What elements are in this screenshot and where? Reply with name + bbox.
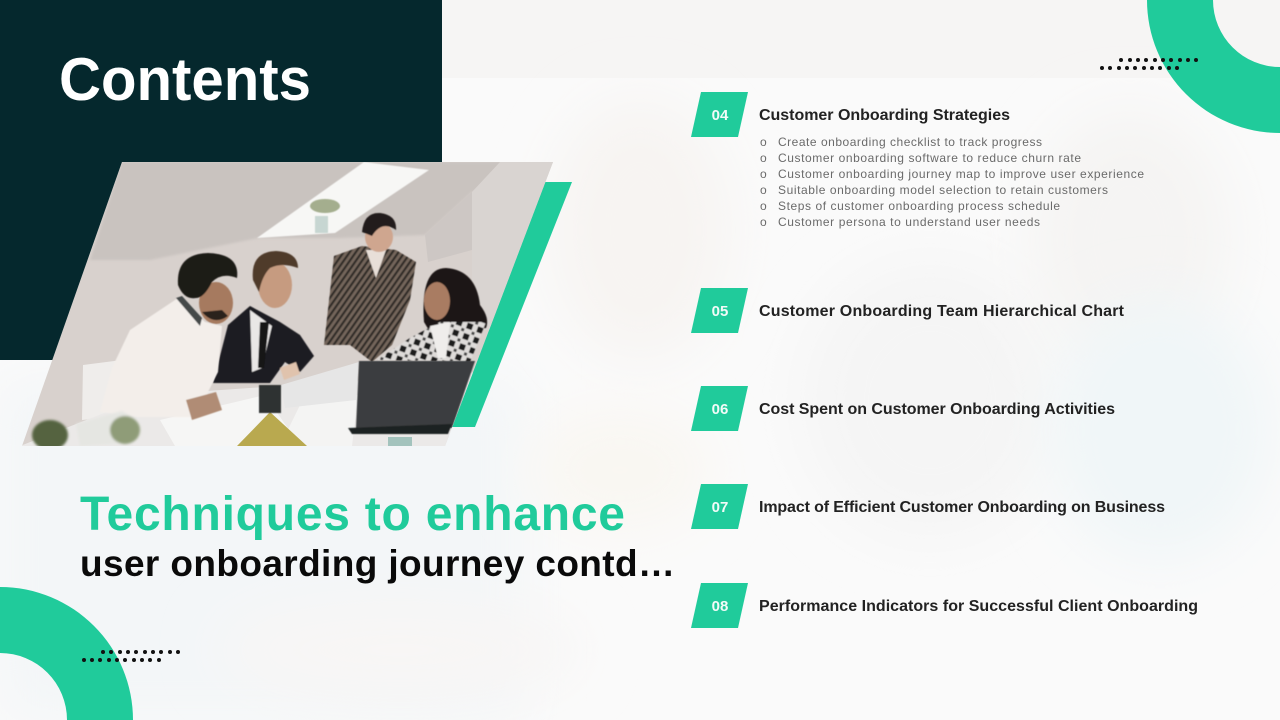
man in dark suit [213, 251, 314, 383]
title: Contents [59, 46, 311, 113]
bullet list 04: Suitable onboarding model selection to retain customers [778, 183, 1108, 197]
item 08: Performance Indicators: Performance Indicators for Successful Client Onboarding [759, 598, 1198, 615]
table [20, 372, 480, 446]
dot pattern: bottom left [82, 650, 180, 662]
bullet list 04: o [760, 183, 767, 197]
bullet list 04: o [760, 135, 767, 149]
item 07: Impact on Business [691, 484, 1165, 529]
item 07: Impact on Business: Impact of Efficient Customer Onboarding on Business [759, 499, 1165, 516]
item 08: Performance Indicators [691, 583, 1198, 628]
photo: team meeting around a laptop [22, 162, 553, 446]
pen cup [259, 385, 281, 413]
foreground plant and white box [32, 411, 140, 450]
badge 04: 04 [712, 107, 729, 124]
dot pattern: top right [1100, 58, 1198, 70]
item 05: Team Hierarchical Chart: Customer Onboarding Team Hierarchical Chart [759, 303, 1125, 320]
item 05: Team Hierarchical Chart [691, 288, 1125, 333]
badge 04 [691, 92, 748, 137]
decorative arc: bottom left [0, 587, 133, 720]
bullet list 04: o [760, 167, 767, 181]
bullet list 04: o [760, 215, 767, 229]
bullet list 04: Customer onboarding software to reduce churn rate [778, 151, 1081, 165]
decorative arc: top right [1147, 0, 1280, 133]
bullet list 04: Customer persona to understand user needs [778, 215, 1040, 229]
headline [80, 488, 675, 584]
bullet list 04: Customer onboarding journey map to improve user experience [778, 167, 1144, 181]
man in white sweater [100, 253, 237, 420]
headline: Techniques to enhance [80, 488, 625, 541]
bullet list 04 [760, 135, 1144, 229]
laptop [348, 361, 475, 434]
item 08: Performance Indicators: 08 [712, 598, 728, 615]
dark title panel [0, 0, 442, 360]
item 07: Impact on Business: 07 [712, 499, 728, 516]
wall plant [310, 199, 340, 233]
item 06: Cost Spent [691, 386, 1115, 431]
standing woman [324, 213, 416, 362]
heading 04: Customer Onboarding Strategies [759, 107, 1010, 124]
green accent strip behind photo [448, 182, 572, 427]
white chair [82, 361, 116, 420]
bullet list 04: Steps of customer onboarding process schedule [778, 199, 1060, 213]
yellow folder [237, 412, 307, 446]
item 06: Cost Spent: 06 [712, 401, 728, 418]
item 06: Cost Spent: Cost Spent on Customer Onboarding Activities [759, 401, 1115, 418]
headline: user onboarding journey contd… [80, 543, 675, 584]
bullet list 04: Create onboarding checklist to track progress [778, 135, 1042, 149]
woman in plaid [377, 268, 487, 362]
bullet list 04: o [760, 151, 767, 165]
item 05: Team Hierarchical Chart: 05 [712, 303, 728, 320]
bullet list 04: o [760, 199, 767, 213]
item 04: Customer Onboarding Strategies [691, 92, 1144, 229]
teal note [388, 437, 412, 447]
